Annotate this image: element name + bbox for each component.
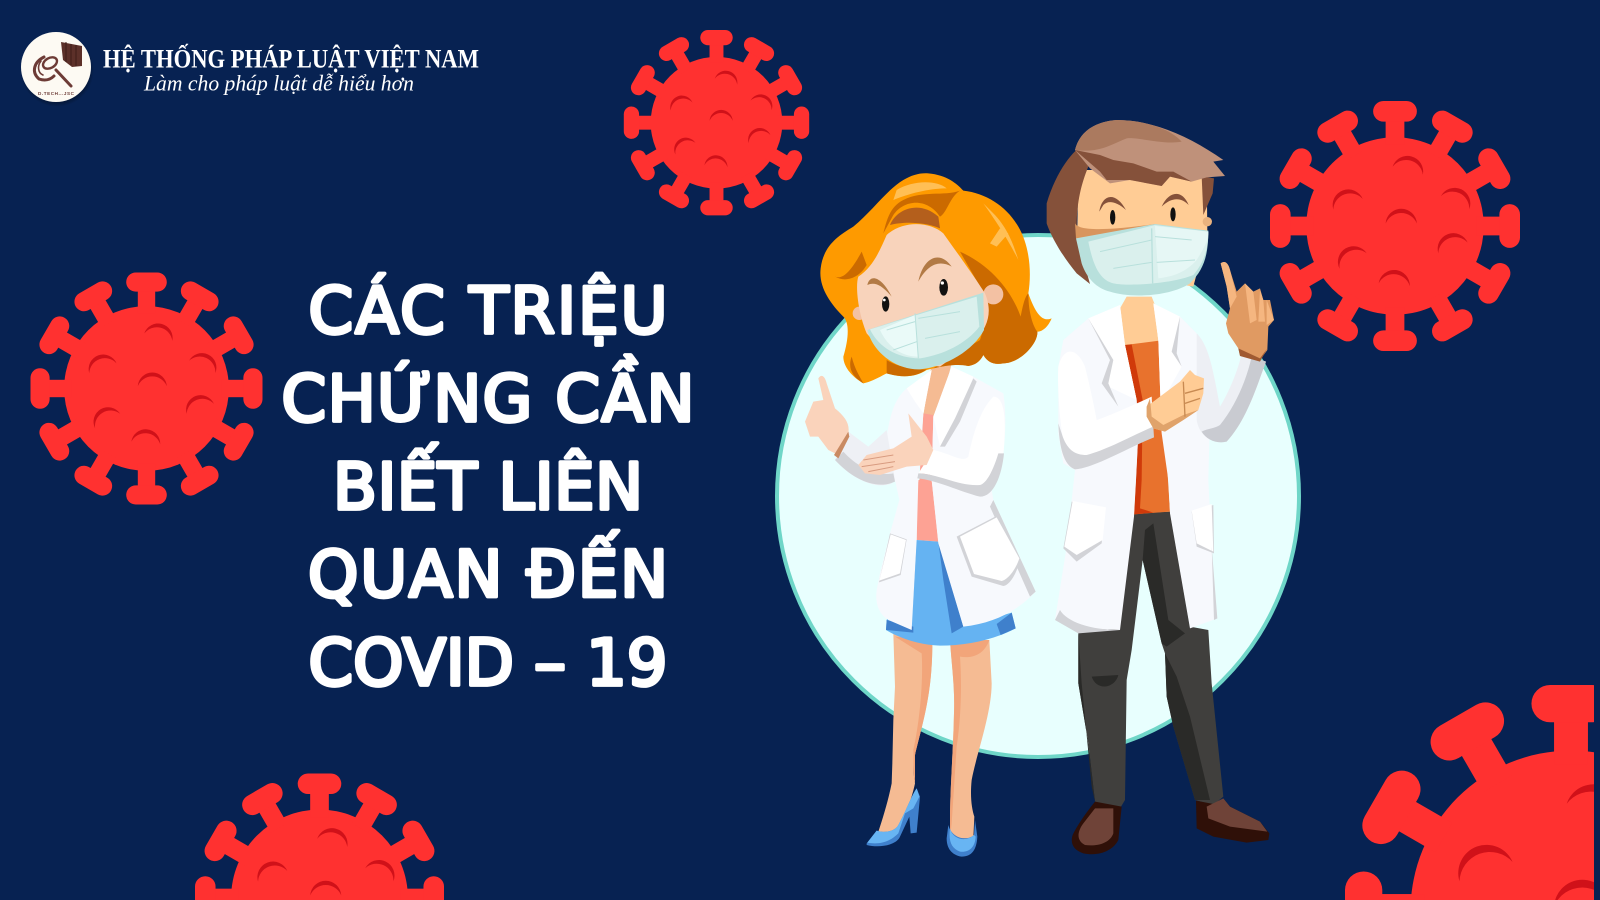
woman coat lower	[876, 480, 1036, 630]
man eyes	[1110, 210, 1115, 225]
icon: books	[61, 42, 82, 67]
woman eyebrows	[867, 257, 952, 297]
woman legs	[867, 480, 1036, 857]
icon: virus bottom right	[1345, 685, 1600, 900]
man right sleeve	[1197, 333, 1266, 441]
woman fringe	[835, 252, 867, 279]
man chest fist	[1147, 370, 1204, 432]
icon: virus top centre	[624, 30, 809, 215]
woman coat upper	[887, 367, 1005, 482]
woman open hand	[858, 413, 933, 475]
icon: virus left	[31, 272, 263, 504]
icon: magnifier and gavel	[34, 55, 71, 86]
man coat	[1055, 305, 1138, 630]
woman doctor	[805, 173, 1052, 857]
logo	[20, 32, 94, 107]
woman ears	[983, 284, 1003, 304]
woman neck	[923, 363, 952, 417]
man top hair	[1075, 120, 1225, 186]
icon: virus top right	[1270, 101, 1520, 351]
woman blouse	[917, 480, 938, 542]
woman blouse top	[919, 413, 933, 482]
title: BIẾT LIÊN	[333, 443, 643, 525]
icon: virus bottom left	[195, 774, 444, 900]
woman face	[857, 224, 989, 367]
title: QUAN ĐẾN	[308, 530, 668, 612]
man pointing hand	[1221, 262, 1274, 360]
title	[282, 273, 694, 701]
logo caption: D.TECH...JSC	[38, 91, 75, 96]
woman right sleeve	[918, 397, 1005, 493]
woman pointing hand	[805, 376, 849, 455]
man trousers	[1078, 512, 1223, 808]
woman eyes	[882, 296, 889, 312]
woman skirt	[886, 540, 1016, 646]
man ears	[1058, 234, 1077, 253]
tagline: Làm cho pháp luật dễ hiểu hơn	[143, 71, 414, 96]
man doctor	[1047, 120, 1274, 854]
man shoes	[1072, 798, 1269, 854]
man shirt	[1125, 341, 1170, 514]
doctors	[805, 120, 1274, 857]
woman left sleeve	[835, 430, 895, 485]
title: COVID – 19	[308, 627, 668, 701]
man head	[1077, 170, 1207, 287]
brand name: HỆ THỐNG PHÁP LUẬT VIỆT NAM	[103, 45, 479, 74]
man mask	[1076, 224, 1208, 295]
man eyebrows	[1099, 194, 1189, 212]
man neck	[1120, 297, 1158, 347]
woman back hair	[820, 173, 1052, 383]
woman mask	[867, 293, 984, 369]
man side hair	[1047, 143, 1090, 284]
woman shoes	[867, 788, 977, 857]
circle backdrop	[777, 235, 1299, 757]
title: CHỨNG CẦN	[282, 355, 694, 437]
title: CÁC TRIỆU	[308, 273, 668, 349]
man front arm	[1058, 352, 1153, 468]
